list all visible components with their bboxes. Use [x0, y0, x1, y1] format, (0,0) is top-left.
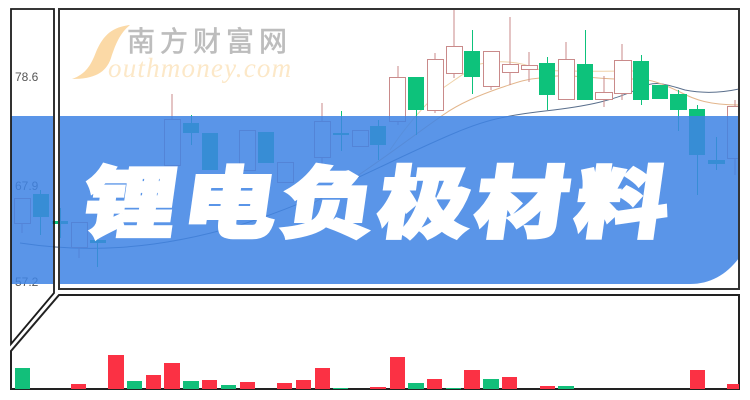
title: 锂电负极材料: 极: [372, 140, 481, 254]
price axis labels: 57.2: [15, 275, 39, 289]
red volume bars: [71, 355, 739, 389]
watermark: southmoney logo: [72, 25, 292, 83]
title: 锂电负极材料: 负: [276, 140, 385, 254]
title: 锂电负极材料: 锂: [77, 140, 186, 254]
price axis labels: 67.9: [15, 179, 39, 193]
green candles: [33, 30, 725, 267]
title: 锂电负极材料: 料: [569, 140, 678, 254]
volume panel frame: [11, 295, 739, 389]
hollow red candles: [14, 9, 740, 258]
title: 锂电负极材料: 材: [469, 140, 578, 254]
title: 锂电负极材料: 电: [177, 140, 286, 254]
price axis labels: [15, 70, 39, 289]
candlesticks: [14, 9, 740, 267]
price axis labels: 78.6: [15, 70, 39, 84]
green volume bars: [15, 368, 574, 389]
watermark: southmoney logo: 南方财富网: [127, 26, 292, 57]
moving average lines: [20, 62, 739, 248]
left axis panel frame: [11, 9, 54, 344]
main candlestick panel frame: [59, 9, 739, 289]
title: 锂电负极材料: [77, 140, 678, 254]
blue title banner: [11, 116, 739, 284]
watermark: southmoney logo: outhmoney.com: [108, 53, 292, 83]
volume bars: [15, 355, 739, 389]
